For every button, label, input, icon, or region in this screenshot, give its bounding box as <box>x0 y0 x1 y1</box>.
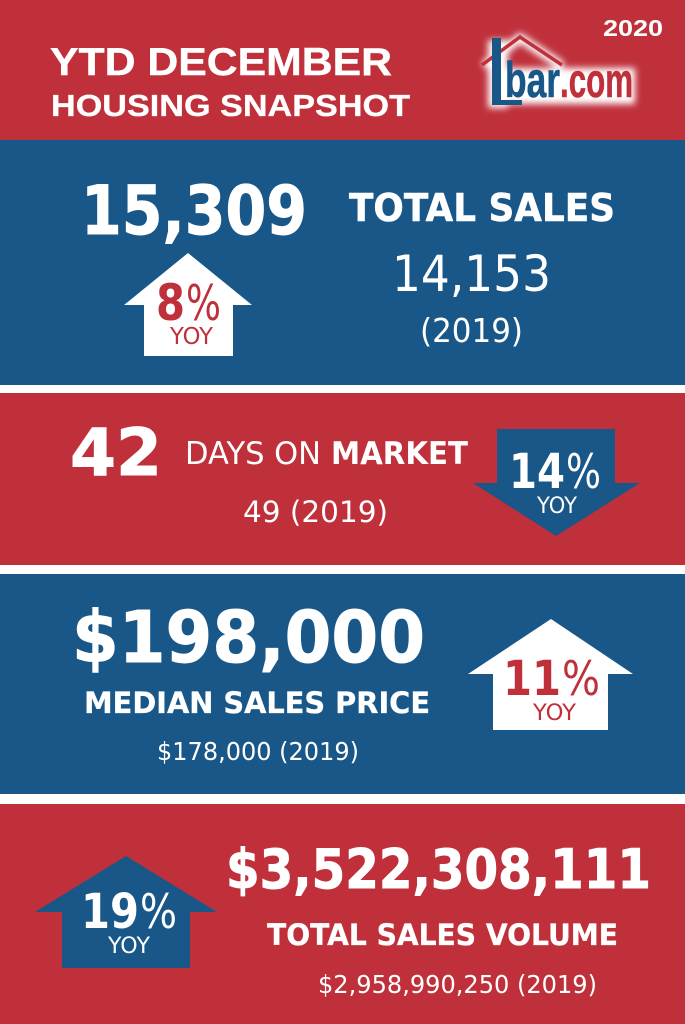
2019 total sales volume: $2,958,990,250 (2019) <box>318 970 597 999</box>
icon: up arrow 11% YOY: 11 <box>503 651 561 707</box>
icon: up arrow 19% YOY: % <box>140 885 177 940</box>
total sales label: TOTAL SALES <box>349 186 615 230</box>
icon: down arrow 14% YOY <box>473 429 640 536</box>
icon: up arrow 8% YOY: YOY <box>169 324 214 350</box>
days on market label: DAYS ON <box>185 436 321 472</box>
heading: Housing Snapshot: HOUSING SNAPSHOT <box>51 88 410 123</box>
logo: lbar.com <box>482 37 635 108</box>
2019 total sales value: 14,153 <box>392 245 551 303</box>
icon: up arrow 8% YOY <box>124 253 252 356</box>
year label: 2020 <box>603 15 663 41</box>
median sales price value: $198,000 <box>72 596 425 679</box>
icon: up arrow 11% YOY <box>468 619 633 730</box>
total sales volume label: TOTAL SALES VOLUME <box>267 918 618 952</box>
days on market label: MARKET <box>331 436 468 472</box>
2019 median sales price: $178,000 (2019) <box>157 737 359 766</box>
panel: days on market <box>0 393 685 565</box>
icon: down arrow 14% YOY: YOY <box>536 494 578 519</box>
2019 year label: (2019) <box>420 311 523 350</box>
icon: down arrow 14% YOY: % <box>566 445 601 500</box>
icon: up arrow 11% YOY: % <box>562 652 600 707</box>
panel: total sales <box>0 140 685 385</box>
logo: lbar.com: .com <box>560 55 633 108</box>
total sales value: 15,309 <box>81 172 307 251</box>
panel: median sales price <box>0 574 685 794</box>
2019 days on market: 49 (2019) <box>243 495 388 529</box>
heading: YTD December: YTD DECEMBER <box>50 41 392 84</box>
icon: up arrow 19% YOY <box>35 856 217 968</box>
icon: up arrow 19% YOY: 19 <box>81 884 139 940</box>
days on market value: 42 <box>70 416 162 491</box>
panel: total sales volume <box>0 804 685 1024</box>
icon: up arrow 8% YOY: % <box>186 275 221 332</box>
icon: down arrow 14% YOY: 14 <box>509 444 565 500</box>
days on market label <box>185 436 468 472</box>
icon: up arrow 19% YOY: YOY <box>107 934 151 959</box>
logo: lbar.com: bar <box>505 52 560 108</box>
median sales price label: MEDIAN SALES PRICE <box>84 686 430 720</box>
panel: header <box>0 0 685 140</box>
icon: up arrow 8% YOY: 8 <box>156 274 185 332</box>
icon: up arrow 11% YOY: YOY <box>532 701 577 726</box>
